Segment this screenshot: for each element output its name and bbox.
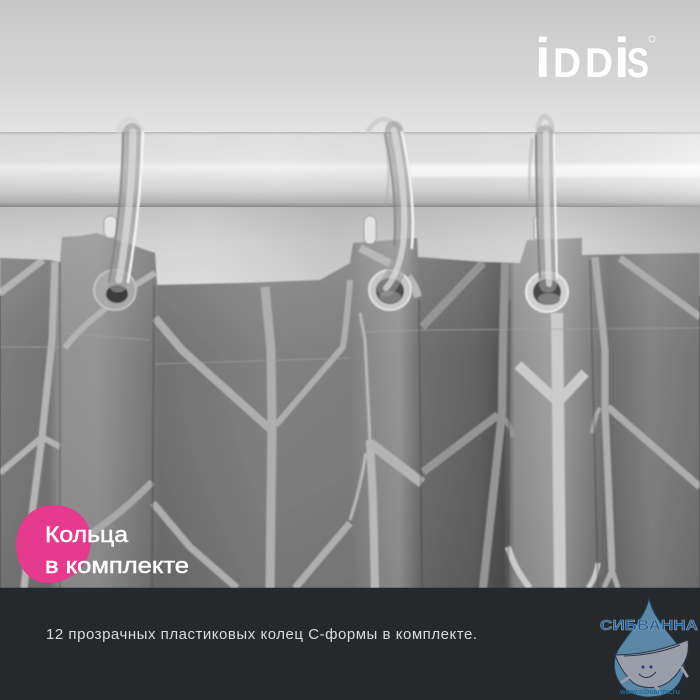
- icon: grommet 2: [369, 270, 411, 310]
- text: description: 12 прозрачных пластиковых колец С-формы в комплекте.: [46, 626, 477, 643]
- wall above the rod: [0, 0, 700, 134]
- heading: rings included: [45, 522, 189, 578]
- logo: IDDIS: i: [535, 26, 551, 89]
- header stitching: [0, 328, 700, 364]
- text: website: www.sibvanna.ru: [619, 687, 680, 696]
- logo: IDDIS: D: [585, 39, 613, 86]
- logo: IDDIS: [535, 26, 655, 89]
- right section stripes: [592, 257, 700, 588]
- icon: grommet 3: [526, 272, 568, 312]
- icon: ring tails behind rod: [104, 216, 541, 244]
- recess stripes: [422, 263, 513, 588]
- heading: rings included: Кольца: [45, 522, 129, 547]
- center chevron stripes: [153, 280, 350, 588]
- photo: curtain: [0, 233, 700, 588]
- icon: water drop: [614, 598, 684, 697]
- logo: IDDIS: D: [553, 39, 581, 86]
- third pleat stripes: [508, 313, 598, 588]
- badge: pink circle: [16, 505, 91, 583]
- icon: ring 3: [529, 116, 557, 284]
- icon: smiling bathtub: [615, 640, 688, 692]
- left section stripes: [0, 260, 155, 588]
- icon: ring 1: [109, 119, 143, 284]
- logo: Sibvanna: [600, 598, 698, 697]
- pleat edge shadows: [60, 260, 598, 588]
- wall below the rod: [0, 206, 700, 296]
- icon: grommet 1: [94, 270, 136, 310]
- logo: IDDIS: S: [627, 39, 649, 86]
- logo: IDDIS: i: [614, 26, 630, 89]
- heading: rings included: в комплекте: [45, 553, 189, 578]
- icon: ring 2: [368, 119, 413, 288]
- text: brand name: СИБВАННА: [600, 617, 698, 634]
- footer band: [0, 588, 700, 700]
- photo: rod: [0, 132, 700, 207]
- second pleat stripes: [350, 248, 422, 588]
